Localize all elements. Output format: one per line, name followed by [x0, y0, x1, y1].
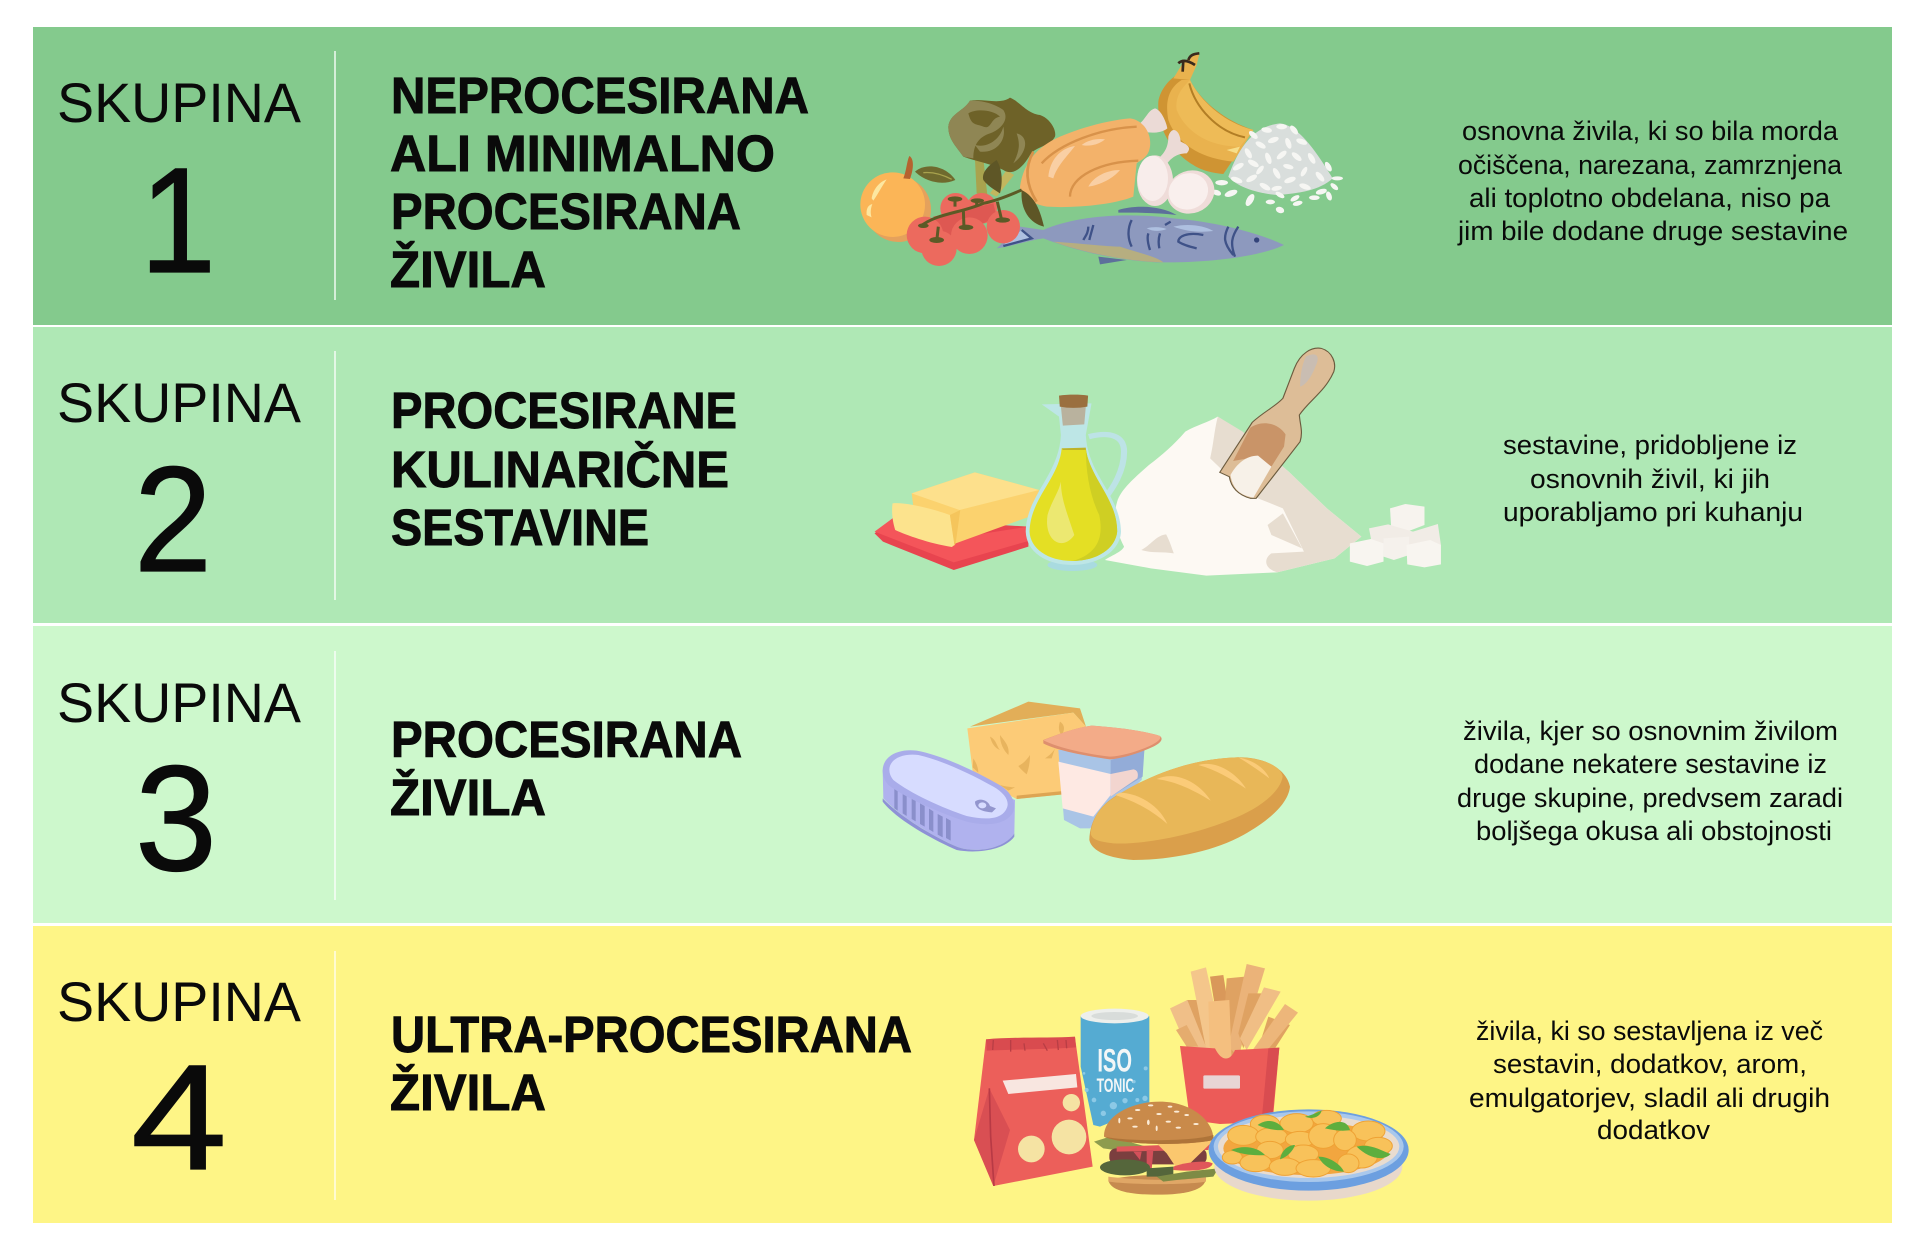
icon: broccoli: [948, 98, 1055, 197]
group label 3: SKUPINA: [57, 671, 302, 734]
heading 3: ŽIVILA: [390, 768, 546, 826]
heading 2: SESTAVINE: [391, 499, 649, 556]
group number 1: 1: [140, 136, 216, 304]
illustration: processed foods: [883, 702, 1290, 860]
heading 2: PROCESIRANE: [391, 382, 737, 439]
panel: skupina 2: [33, 327, 1892, 623]
description 4: sestavin, dodatkov, arom,: [1493, 1049, 1807, 1079]
icon: sugar cubes: [1350, 504, 1441, 567]
heading 1: ALI MINIMALNO: [390, 125, 775, 182]
heading 2: KULINARIČNE: [391, 440, 729, 498]
heading 3: [390, 711, 742, 826]
description 4: [1469, 1016, 1830, 1145]
description 3: živila, kjer so osnovnim živilom: [1463, 716, 1838, 746]
group label 1: SKUPINA: [57, 71, 302, 134]
heading 1: PROCESIRANA: [391, 183, 741, 240]
heading 4: ULTRA-PROCESIRANA: [391, 1006, 912, 1063]
description 1: ali toplotno obdelana, niso pa: [1469, 183, 1831, 213]
icon: plate of nuggets: [1209, 1109, 1409, 1201]
heading 1: ŽIVILA: [390, 240, 546, 298]
group label 2: SKUPINA: [57, 371, 302, 434]
icon: isotonic can: TONIC: [1097, 1076, 1134, 1097]
description 3: druge skupine, predvsem zaradi: [1457, 783, 1843, 813]
icon: isotonic can: ISO: [1097, 1042, 1132, 1078]
group number 3: 3: [135, 734, 217, 902]
icon: eggs: [1137, 155, 1221, 220]
group number 4: 4: [131, 1033, 227, 1201]
description 2: osnovnih živil, ki jih: [1530, 464, 1770, 494]
description 1: osnovna živila, ki so bila morda: [1462, 116, 1839, 146]
description 1: jim bile dodane druge sestavine: [1457, 216, 1848, 246]
icon: french fries: [1170, 964, 1298, 1124]
illustration: ultra-processed foods: [974, 964, 1409, 1201]
illustration: unprocessed foods: [860, 53, 1343, 266]
description 4: dodatkov: [1597, 1115, 1711, 1145]
illustration: culinary ingredients: [875, 348, 1441, 576]
icon: cheese: [967, 702, 1086, 799]
icon: isotonic can: [1081, 1009, 1149, 1127]
icon: rice: [1211, 123, 1343, 214]
group label 4: SKUPINA: [57, 970, 302, 1033]
icon: orange: [860, 156, 955, 242]
icon: butter on tray: [875, 472, 1039, 570]
heading 1: [390, 67, 809, 298]
icon: oil bottle: [1026, 395, 1124, 571]
icon: tomatoes: [907, 190, 1044, 266]
icon: bread: [1089, 757, 1290, 860]
description 3: boljšega okusa ali obstojnosti: [1476, 816, 1832, 846]
heading 4: ŽIVILA: [390, 1063, 546, 1121]
description 1: [1457, 116, 1848, 246]
icon: snack bag: [974, 1037, 1093, 1186]
icon: wooden scoop: [1220, 348, 1335, 498]
heading 1: NEPROCESIRANA: [391, 67, 809, 124]
description 3: dodane nekatere sestavine iz: [1474, 749, 1827, 779]
description 2: uporabljamo pri kuhanju: [1503, 497, 1803, 527]
icon: flour pile: [1105, 417, 1361, 576]
icon: fish: [997, 207, 1284, 264]
panel: skupina 1: [33, 27, 1892, 325]
description 3: [1457, 716, 1843, 846]
heading 4: [390, 1006, 912, 1121]
icon: banana: [1158, 53, 1253, 174]
panel: skupina 3: [33, 626, 1892, 923]
description 4: emulgatorjev, sladil ali drugih: [1469, 1083, 1830, 1113]
icon: burger: [1094, 1102, 1218, 1195]
icon: yogurt: [1043, 726, 1162, 828]
icon: chicken: [1020, 108, 1189, 207]
description 2: [1503, 430, 1803, 527]
group number 2: 2: [134, 435, 212, 603]
icon: tin can: [883, 750, 1015, 851]
description 2: sestavine, pridobljene iz: [1503, 430, 1797, 460]
heading 2: [391, 382, 737, 556]
description 1: očiščena, narezana, zamrznjena: [1458, 150, 1843, 180]
heading 3: PROCESIRANA: [391, 711, 742, 768]
panel: skupina 4: [33, 926, 1892, 1223]
description 4: živila, ki so sestavljena iz več: [1476, 1016, 1823, 1046]
